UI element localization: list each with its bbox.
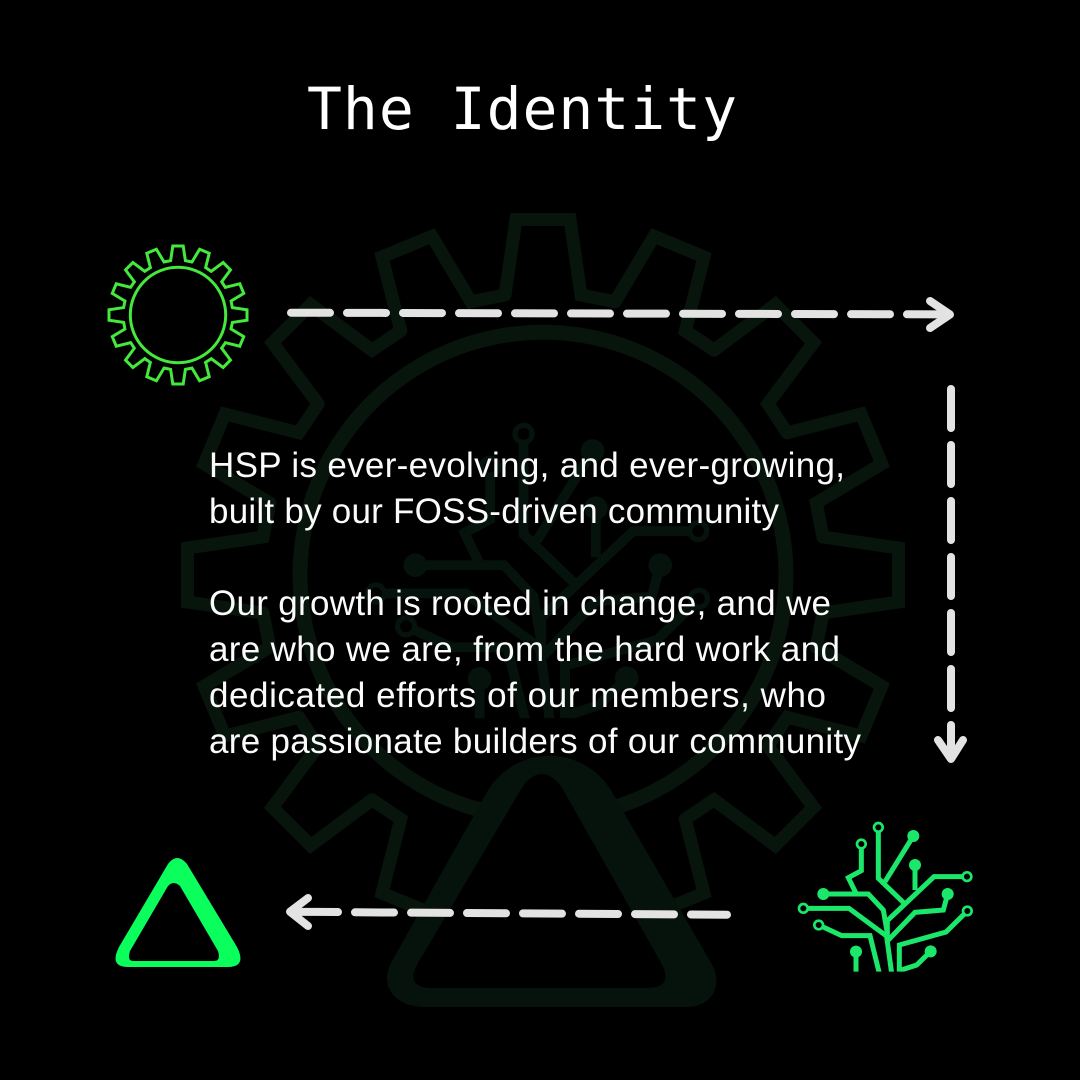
text block: first paragraph: [209, 446, 845, 531]
text block: second paragraph: are who we are, from the hard work and: [209, 630, 840, 669]
arrow: tree to triangle, dashed left: [290, 898, 727, 926]
infographic canvas: [108, 85, 973, 1007]
watermark: gear outline: [187, 219, 899, 918]
icon: circuit tree: [799, 823, 972, 973]
watermark: flask triangle: [387, 756, 716, 1007]
title: The Identity: [307, 75, 737, 143]
text block: second paragraph: are passionate builders of our community: [209, 722, 862, 761]
text block: second paragraph: dedicated efforts of our members, who: [209, 676, 826, 715]
text block: first paragraph: built by our FOSS-driven community: [209, 492, 780, 531]
watermark: gear inner ring: [300, 332, 786, 813]
watermark: circuit tree: [367, 425, 708, 721]
arrow: gear to tree, dashed right: [291, 301, 950, 328]
icon: green gear: [109, 246, 247, 384]
text block: second paragraph: [209, 584, 862, 761]
icon: green flask triangle: [116, 858, 240, 967]
arrow: dashed down: [938, 389, 963, 759]
text block: second paragraph: Our growth is rooted in change, and we: [209, 584, 831, 623]
watermark: large background logo: [187, 219, 899, 1007]
text block: first paragraph: HSP is ever-evolving, and ever-growing,: [209, 446, 845, 485]
